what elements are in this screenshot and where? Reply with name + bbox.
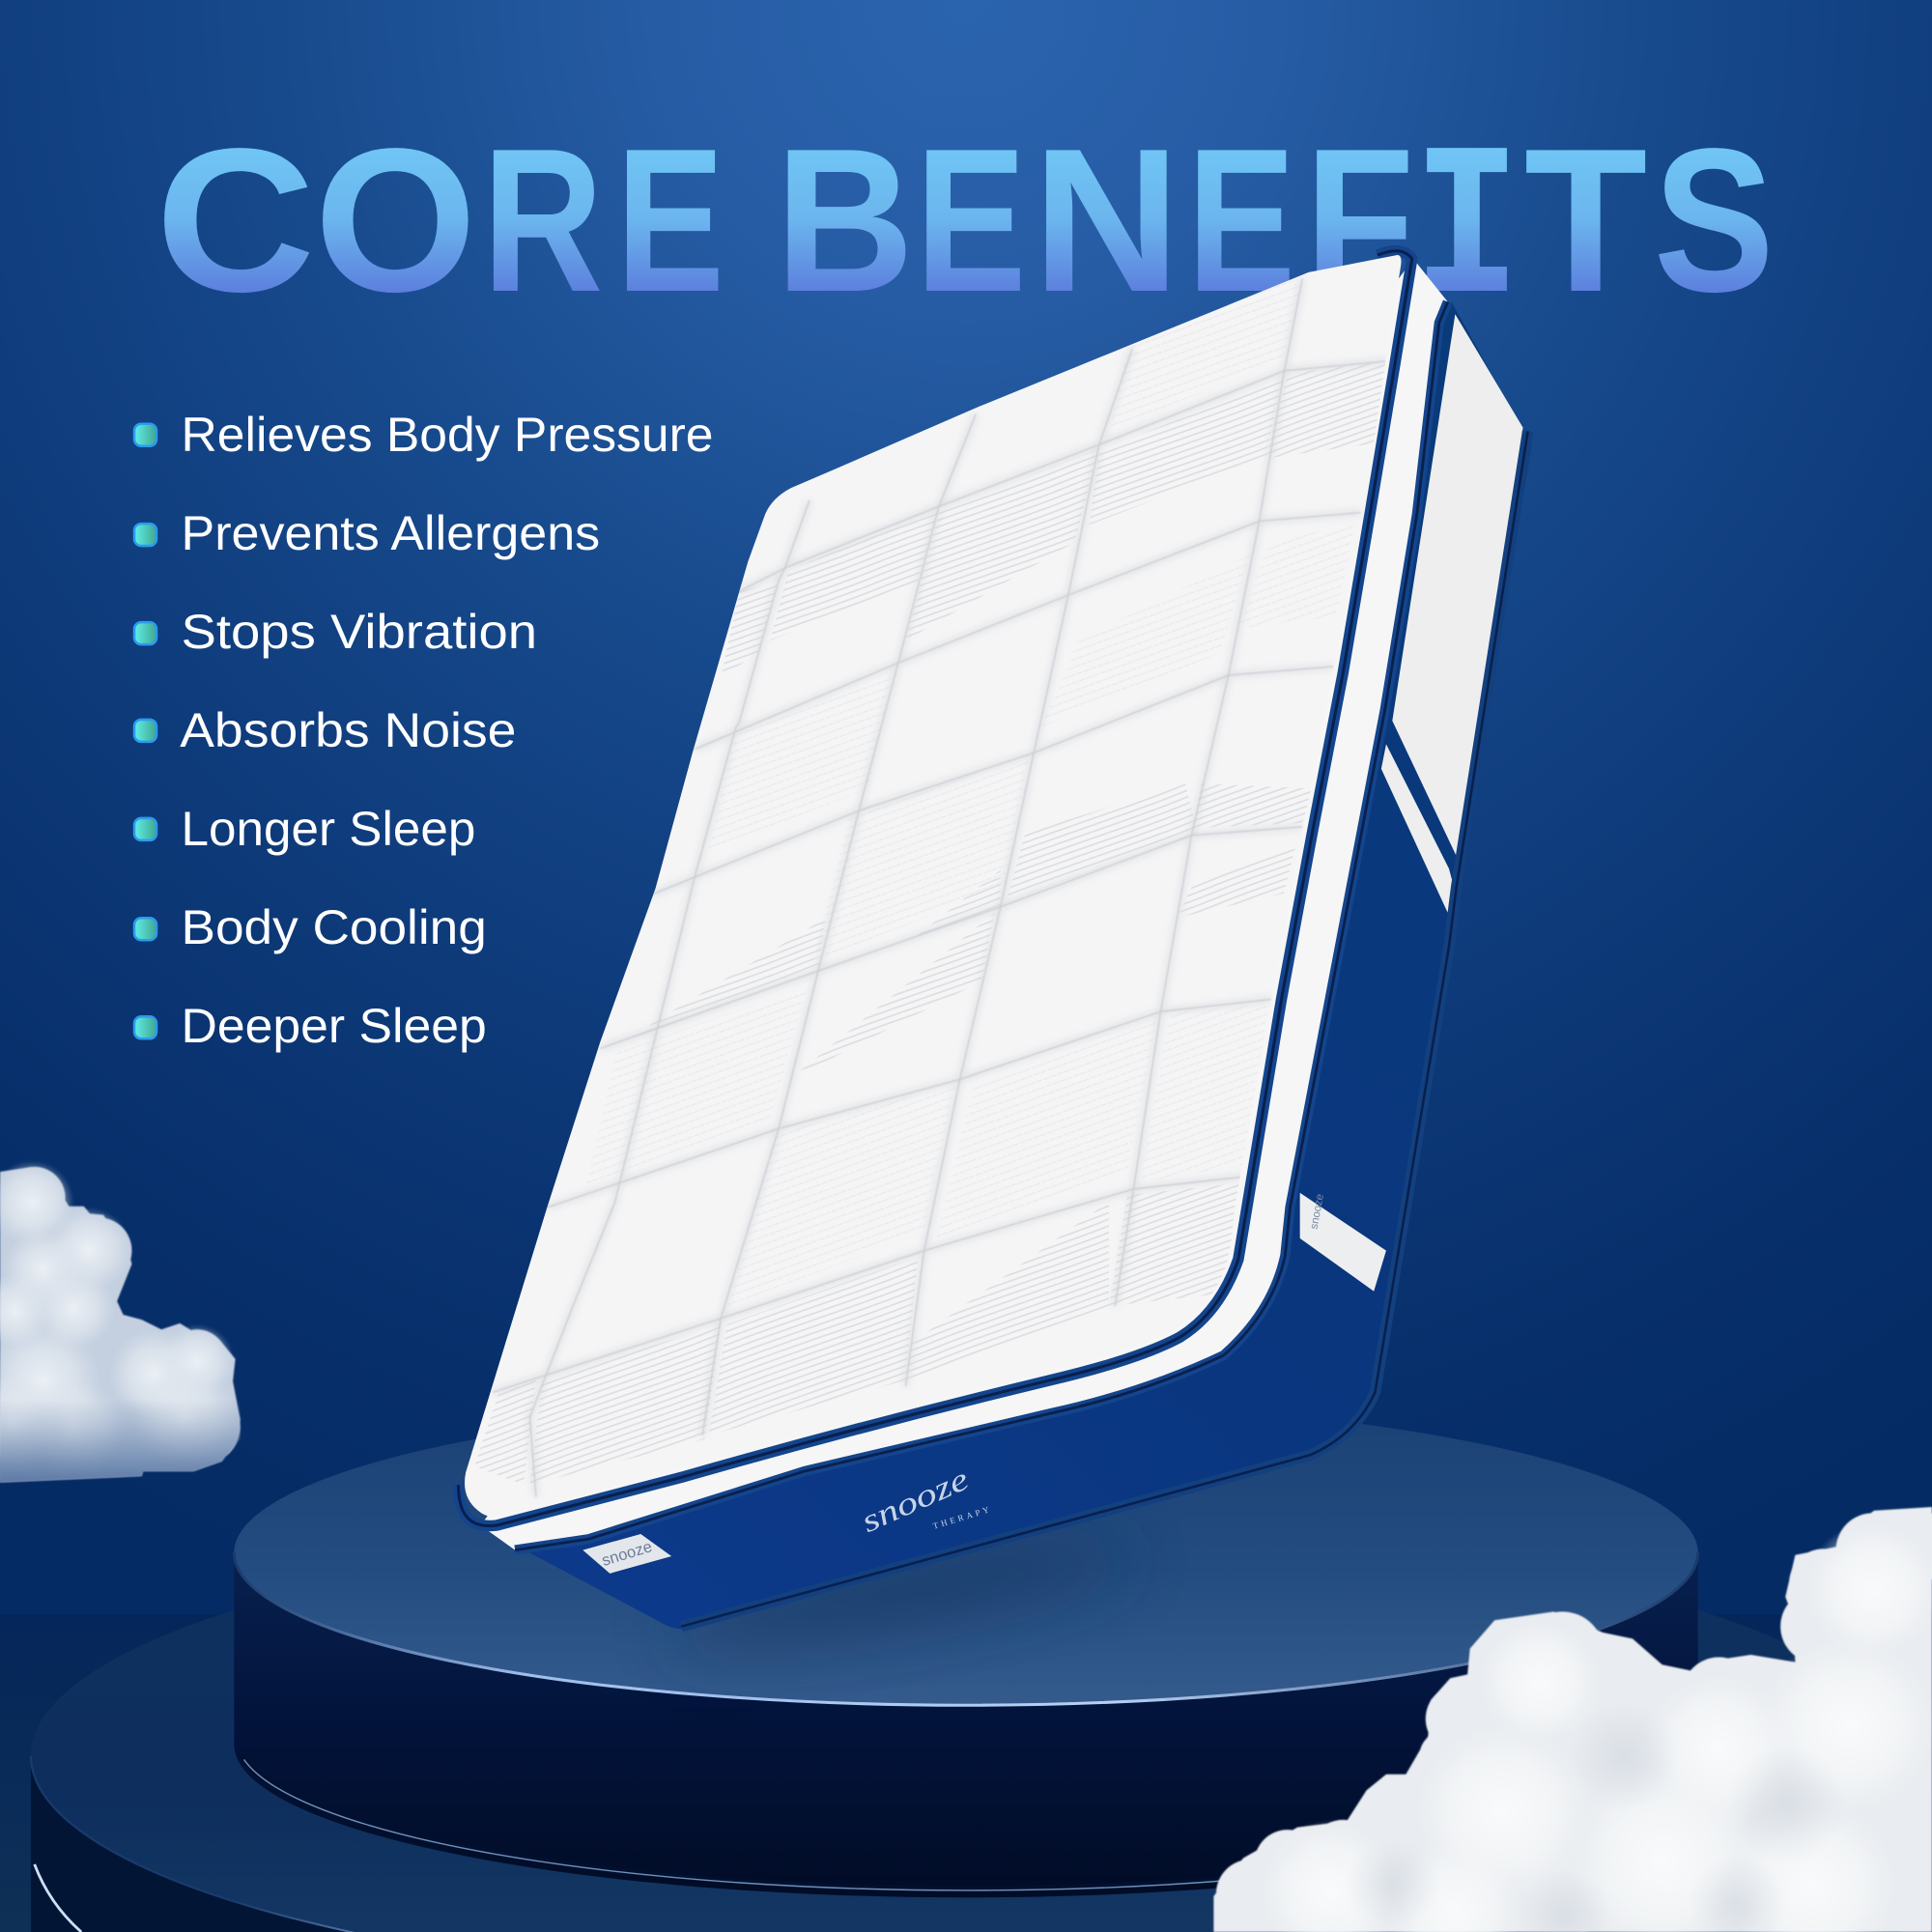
brand logo: snooze (856, 1462, 974, 1540)
title: B (775, 105, 914, 334)
front label tag (582, 1534, 671, 1574)
title: E (1187, 105, 1295, 334)
benefits list (134, 408, 714, 1053)
title: E (616, 105, 724, 334)
lower podium disk (31, 1521, 1901, 1932)
cloud: bottom left (0, 1161, 241, 1482)
upper piping (458, 251, 1412, 1526)
title: T (1524, 105, 1647, 334)
upper podium disk (234, 1400, 1698, 1897)
side label tag (1300, 1193, 1386, 1292)
title: I (1413, 111, 1520, 356)
front label tag: snooze (600, 1537, 654, 1570)
benefit: absorbs noise: Absorbs Noise (180, 703, 516, 757)
brand logo: THERAPY (931, 1504, 993, 1531)
title: C (156, 105, 316, 334)
benefit: stops vibration: Stops Vibration (182, 605, 537, 659)
title: O (314, 105, 477, 334)
benefit: longer sleep: Longer Sleep (182, 802, 475, 856)
title: F (1305, 105, 1414, 334)
title: R (482, 105, 603, 334)
benefit: relieves body pressure: Relieves Body Pressure (182, 408, 714, 462)
mattress white band (480, 259, 1448, 1550)
title: S (1654, 105, 1775, 334)
quilted top face (443, 234, 1430, 1540)
side label tag: snooze (1309, 1193, 1326, 1230)
floor band (0, 1614, 1932, 1932)
benefit: deeper sleep: Deeper Sleep (182, 999, 487, 1053)
title: N (1033, 105, 1180, 334)
brand logo (856, 1462, 993, 1540)
mattress (443, 234, 1531, 1629)
benefit: body cooling: Body Cooling (182, 900, 487, 954)
mattress blue side (518, 301, 1531, 1629)
right outer piping (681, 431, 1528, 1627)
cloud: bottom right (1213, 1507, 1932, 1932)
mattress white side panel (1392, 314, 1523, 862)
benefit: prevents allergens: Prevents Allergens (182, 506, 600, 560)
title: E (916, 105, 1026, 334)
side panel white strip (1381, 744, 1454, 916)
lower piping (515, 301, 1448, 1550)
